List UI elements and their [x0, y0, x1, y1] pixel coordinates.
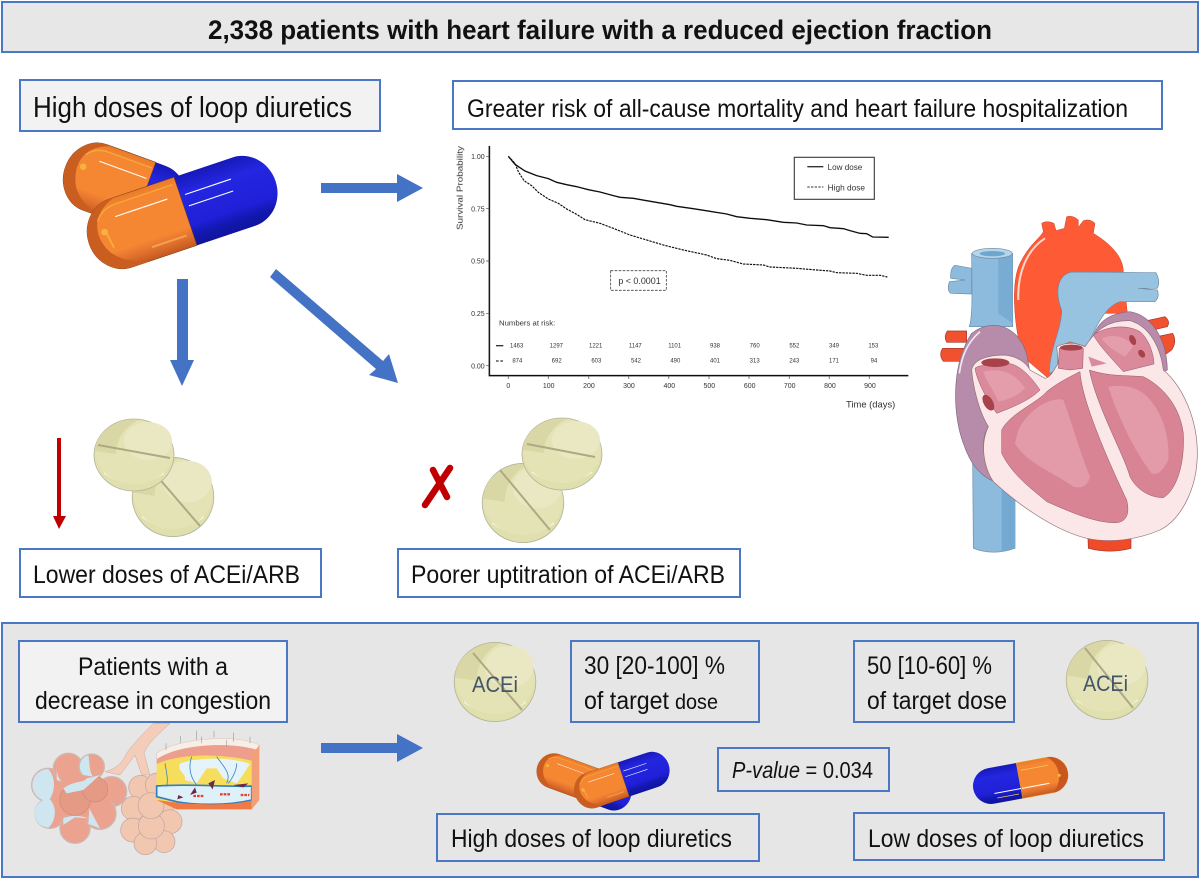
chart: survival curves: Time (days)	[846, 400, 895, 410]
chart: survival curves: 200	[583, 383, 595, 390]
chart: survival curves: 1221	[589, 344, 603, 350]
label: 50 percent of target dose: of target dose	[867, 687, 1007, 715]
label: high doses of loop diuretics: High doses of loop diuretics	[33, 92, 352, 124]
chart: survival curves: 938	[710, 344, 721, 350]
label: high doses of loop diuretics	[20, 80, 380, 131]
chart: survival curves: Numbers at risk:	[499, 319, 555, 328]
label: patients with a decrease in congestion: decrease in congestion	[35, 687, 271, 715]
chart: survival curves: 0.50	[471, 259, 485, 266]
chart: survival curves: 243	[789, 359, 800, 365]
chart: survival curves: 400	[664, 383, 675, 390]
label: poorer uptitration: Poorer uptitration of ACEi/ARB	[411, 561, 725, 589]
chart: survival curves	[455, 145, 908, 410]
arrow: congestion decrease to results	[321, 734, 423, 762]
chart: survival curves: 500	[704, 383, 715, 390]
icon: ACEi tablet, left	[454, 642, 536, 722]
label: poorer uptitration	[398, 549, 740, 597]
icon: capsule, low dose	[970, 754, 1071, 807]
icon: ACEi tablet, right	[1066, 640, 1148, 720]
chart: survival curves: 1463	[510, 344, 524, 350]
icon: lungs and tissue	[32, 723, 259, 855]
chart: survival curves: 94	[871, 359, 878, 365]
chart: survival curves: 0	[506, 383, 510, 390]
panel: patients with a decrease in congestion	[2, 623, 1198, 877]
label: greater risk	[453, 81, 1162, 129]
title banner	[2, 2, 1198, 52]
chart: survival curves: 1.00	[471, 154, 485, 161]
chart: survival curves: 600	[744, 383, 756, 390]
label: patients with a decrease in congestion	[19, 641, 287, 722]
label: low doses of loop diuretics: Low doses of loop diuretics	[868, 825, 1144, 853]
chart: survival curves: p < 0.0001	[618, 276, 661, 286]
chart: survival curves: 0.00	[471, 363, 485, 370]
chart: survival curves: 349	[829, 344, 840, 350]
label: 30 percent of target dose: of target	[584, 687, 669, 715]
chart: survival curves: Survival Probability	[455, 145, 465, 230]
chart: survival curves: 874	[512, 359, 523, 365]
chart: survival curves: 313	[750, 359, 760, 365]
label: patients with a decrease in congestion: Patients with a	[78, 653, 228, 681]
chart: survival curves: 153	[868, 344, 879, 350]
chart: survival curves: 760	[750, 344, 760, 350]
chart: survival curves: 700	[784, 383, 796, 390]
arrow: capsules down to lower doses	[170, 279, 194, 386]
chart: survival curves: 1147	[629, 344, 642, 350]
chart: survival curves: 100	[543, 383, 555, 390]
chart: survival curves: 552	[789, 344, 800, 350]
chart: survival curves: 490	[670, 359, 681, 365]
label: p-value	[718, 748, 889, 791]
title banner: 2,338 patients with heart failure with a reduced ejection fraction	[208, 15, 992, 45]
icon: heart	[941, 216, 1197, 552]
chart: survival curves: Low dose	[828, 163, 863, 172]
chart: survival curves: 542	[631, 359, 642, 365]
label: 30 percent of target dose: dose	[675, 691, 718, 714]
label: lower doses	[20, 549, 321, 597]
chart: survival curves: 692	[552, 359, 562, 365]
chart: survival curves: 0.75	[471, 206, 485, 213]
chart: survival curves: 900	[864, 383, 876, 390]
label: 30 percent of target dose	[571, 641, 759, 722]
label: 30 percent of target dose: 30 [20-100] %	[584, 652, 725, 680]
chart: survival curves: High dose	[828, 183, 866, 192]
label: greater risk: Greater risk of all-cause mortality and heart failure hospitalization	[467, 95, 1128, 123]
label: high doses of loop diuretics, bottom: High doses of loop diuretics	[451, 825, 732, 853]
icon: ACEi tablet, right: ACEi	[1083, 671, 1128, 696]
chart: survival curves: 800	[824, 383, 836, 390]
chart: survival curves: 1101	[668, 344, 682, 350]
icon: ACEi tablet, left: ACEi	[472, 672, 518, 697]
label: 50 percent of target dose: 50 [10-60] %	[867, 652, 992, 680]
icon: tablets, reduced dose	[94, 419, 214, 537]
label: low doses of loop diuretics	[854, 813, 1164, 860]
chart: survival curves: 1297	[550, 344, 564, 350]
arrow: capsules to survival chart	[321, 174, 423, 202]
label: p-value: P-value = 0.034	[732, 757, 873, 783]
chart: survival curves: 300	[623, 383, 635, 390]
label: lower doses: Lower doses of ACEi/ARB	[33, 561, 300, 589]
arrow: capsules to poorer uptitration	[270, 269, 398, 383]
chart: survival curves: 603	[591, 359, 602, 365]
chart: survival curves: 401	[710, 359, 721, 365]
icon: capsules, high dose	[532, 747, 674, 815]
icon: red cross	[425, 468, 450, 505]
icon: red down arrow	[53, 438, 66, 529]
label: 50 percent of target dose	[854, 641, 1014, 722]
label: high doses of loop diuretics, bottom	[437, 814, 759, 861]
chart: survival curves: 0.25	[471, 311, 485, 318]
icon: tablets, no uptitration	[482, 418, 602, 543]
icon: capsules	[54, 134, 287, 278]
chart: survival curves: 171	[829, 359, 840, 365]
